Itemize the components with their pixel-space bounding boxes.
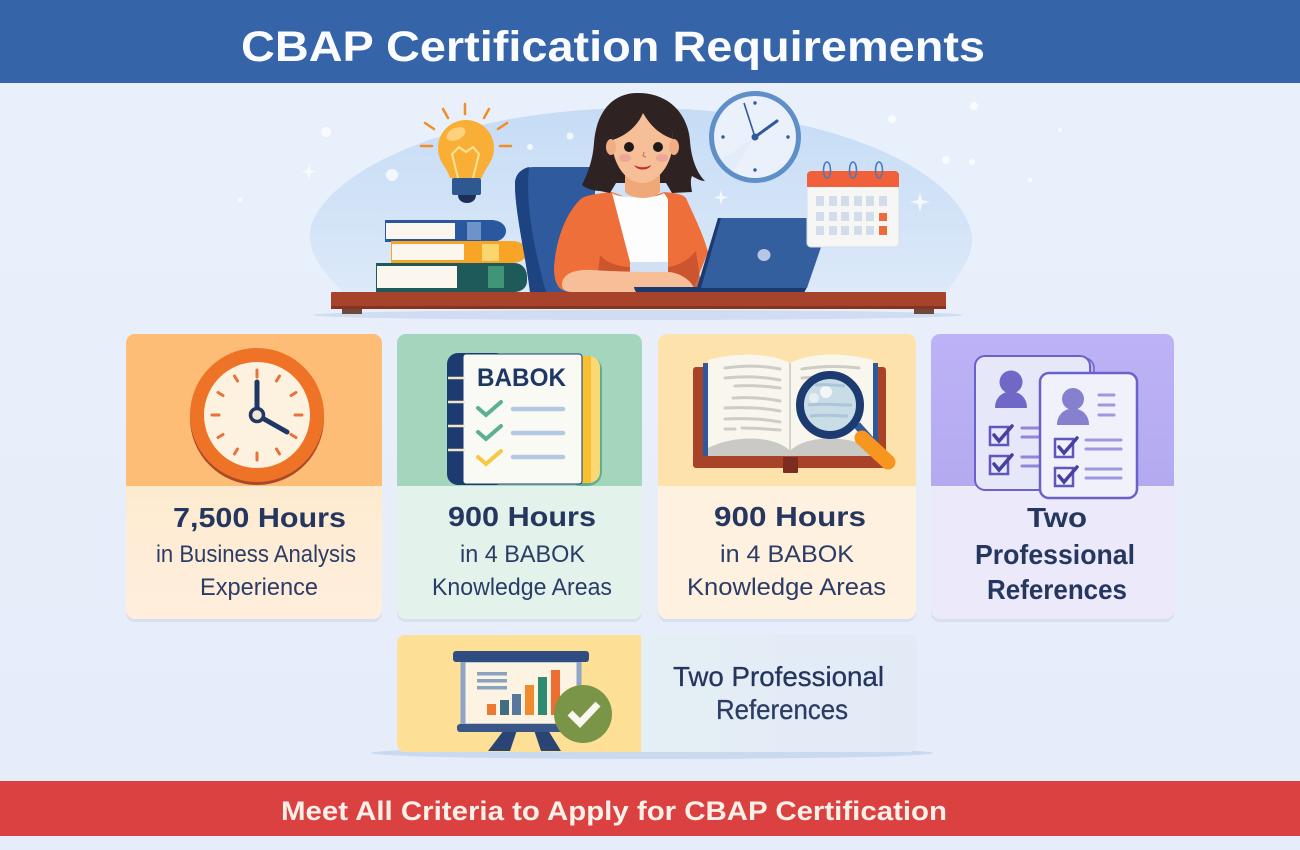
text: 900 hours: in 4 BABOK (720, 541, 854, 568)
card: 900 hours, BABOK notebook (397, 334, 642, 619)
text: 900 hours (687, 501, 886, 601)
icon: BABOK notebook: BABOK (477, 364, 566, 392)
text: two professional references: Professional (975, 539, 1135, 570)
card: two professional references (931, 334, 1174, 619)
lightbulb icon (421, 104, 511, 203)
hero illustration: woman at desk (238, 91, 1062, 320)
woman (554, 93, 708, 292)
header banner (0, 0, 1300, 83)
footer text: Meet All Criteria to Apply for CBAP Certification (281, 796, 947, 826)
card: 900 hours, open book (658, 334, 916, 619)
wall clock (709, 91, 801, 183)
calendar (807, 162, 899, 247)
text: two professional references: Two (1027, 502, 1087, 533)
hair back (582, 93, 705, 193)
title: CBAP Certification Requirements (241, 23, 985, 71)
text: 900 hours: 900 Hours (714, 501, 866, 532)
card: 7,500 hours (126, 334, 382, 619)
cardigan (554, 192, 708, 292)
icon: open book and magnifier (693, 355, 888, 473)
forearm (562, 270, 694, 292)
shadow under desk (313, 310, 963, 320)
icon: BABOK notebook (447, 353, 602, 486)
text: 900 hours: Knowledge Areas (687, 574, 886, 601)
neck (625, 172, 660, 198)
face (612, 112, 673, 183)
bottom card: presentation and references (371, 635, 933, 759)
footer banner (0, 781, 1300, 836)
icon: reference documents (975, 356, 1137, 498)
icon: orange clock (190, 348, 324, 485)
text: two professional references (673, 661, 884, 725)
text: two professional references: Two Professional (673, 661, 884, 692)
stack of books (376, 220, 527, 292)
office chair (515, 167, 595, 292)
text: 7,500 hours (156, 502, 356, 601)
text: two professional references: References (987, 574, 1127, 605)
icon: presentation board with check (453, 651, 612, 751)
text: 900 hours (432, 501, 612, 601)
desk (331, 292, 946, 314)
text: 900 hours: 900 Hours (448, 501, 596, 532)
card shadows (126, 337, 1174, 622)
text: 7,500 hours: 7,500 Hours (173, 502, 346, 533)
background blob (310, 108, 972, 292)
text: 900 hours: in 4 BABOK (460, 541, 585, 568)
text: 7,500 hours: Experience (200, 574, 318, 601)
text: two professional references (975, 502, 1135, 605)
text: two professional references: References (716, 694, 848, 725)
shirt (612, 193, 668, 273)
laptop (634, 218, 830, 293)
text: 900 hours: Knowledge Areas (432, 574, 612, 601)
text: 7,500 hours: in Business Analysis (156, 541, 356, 568)
